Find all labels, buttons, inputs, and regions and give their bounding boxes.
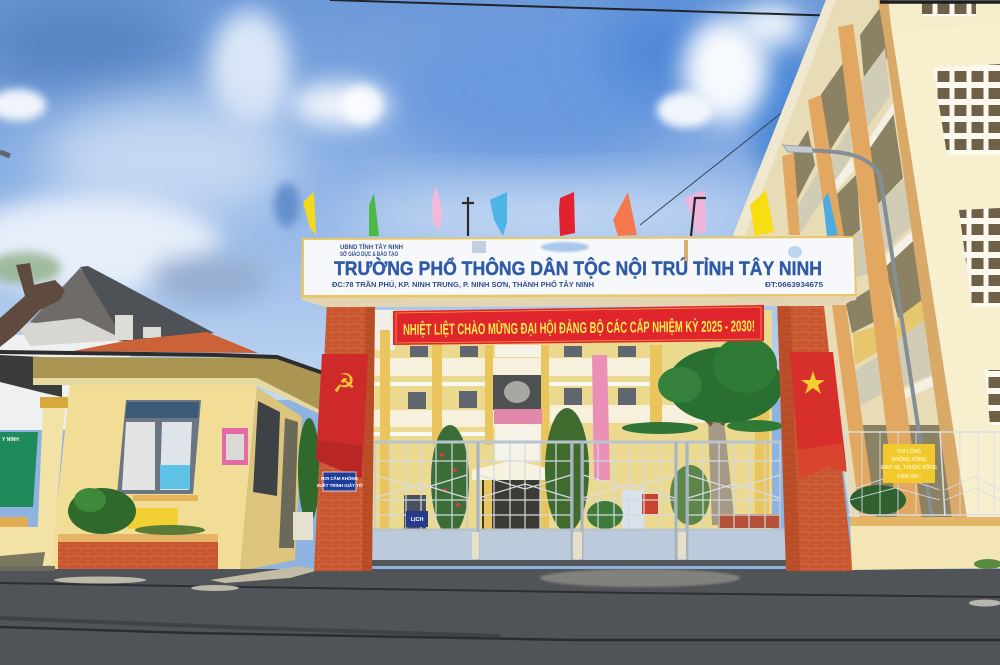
party flag (316, 354, 368, 478)
yellow box (128, 508, 178, 529)
tree at right of courtyard (622, 337, 783, 528)
low yellow wall (0, 527, 42, 556)
side door (279, 418, 298, 548)
right brick pillar (777, 297, 853, 571)
thick roof wire (880, 0, 1000, 4)
planter (58, 534, 218, 571)
pink poster (222, 428, 248, 465)
paint stains (541, 242, 589, 252)
orange corner strip (878, 0, 967, 518)
blue notice plate (316, 472, 363, 491)
photo panel (493, 345, 542, 462)
pink vertical banner (592, 355, 610, 480)
lamp post black (691, 198, 706, 236)
ministry heading (340, 244, 403, 258)
bush (68, 488, 205, 535)
yellow inner walls (853, 300, 927, 365)
flag orange (613, 192, 637, 236)
left background house (0, 266, 214, 430)
orange columns (782, 24, 922, 518)
school name: TRƯỜNG PHỔ THÔNG DÂN TỘC NỘI TRÚ TỈNH TÂY NINH (334, 258, 822, 280)
school sign blue behind gate: LỊCH (411, 517, 423, 523)
road (0, 566, 1000, 665)
ministry heading: SỞ GIÁO DỤC & ĐÀO TẠO (340, 251, 398, 258)
right fence and wall (843, 432, 1000, 570)
window sill (133, 495, 198, 501)
blue notice plate: NƠI CẤM KHÔNG (321, 476, 359, 481)
flag pink 1 (432, 186, 443, 232)
street lamp (0, 145, 932, 518)
red congress banner: NHIỆT LIỆT CHÀO MỪNG ĐẠI HỘI ĐẢNG BỘ CÁC CẤP NHIỆM KỲ 2025 - 2030! (403, 317, 755, 339)
blue notice plate: XUẤT TRÌNH GIẤY TỜ (316, 483, 363, 488)
yellow warning sign (881, 444, 937, 483)
school sign blue behind gate (406, 511, 428, 527)
yellow warning sign: ĐÀO XE, THUỐC XÔNG (881, 463, 937, 471)
top floor cream band (888, 0, 1000, 34)
flags row (303, 186, 838, 236)
grey balconies (797, 48, 933, 411)
soffit (33, 357, 323, 413)
flag yellow 1 (303, 192, 316, 235)
shrubs behind gate (431, 408, 623, 535)
flag cyan (490, 192, 507, 236)
tree stump left (0, 252, 65, 347)
cream end facade (892, 22, 1000, 518)
pole cross (462, 197, 474, 236)
side window (253, 401, 280, 496)
left brick pillar (314, 300, 375, 571)
yellow warning sign: CẢM ƠN ! (897, 473, 921, 480)
dark eave (0, 352, 323, 373)
national flag (790, 352, 847, 479)
dark ceilings (793, 5, 965, 518)
white balcony ledges (828, 103, 936, 400)
side wall (240, 387, 302, 571)
right school wing (733, 0, 1000, 518)
noticeboard window (117, 400, 201, 494)
red congress banner (393, 305, 764, 345)
entrance canopy (404, 460, 658, 530)
yellow columns (380, 330, 769, 530)
building windows (408, 346, 636, 409)
flag pink 2 (684, 190, 706, 236)
green notice board (0, 432, 38, 507)
yellow warning sign: KHÔNG XÔNG (892, 455, 926, 463)
gatehouse (0, 332, 323, 572)
address: ĐC:78 TRẦN PHÚ, KP. NINH TRUNG, P. NINH SƠN, THÀNH PHỐ TÂY NINH (332, 279, 594, 289)
phone: ĐT:0663934675 (765, 282, 823, 289)
dark lattice under left eave (0, 355, 62, 397)
flag yellow 2 (750, 190, 774, 236)
party flag: ☭ (332, 369, 356, 399)
gate sign board (301, 236, 857, 307)
flag red (559, 192, 575, 236)
ministry heading: UBND TỈNH TÂY NINH (340, 244, 403, 251)
sky with clouds (0, 0, 1000, 400)
tile roof (73, 332, 258, 353)
left column (36, 408, 65, 567)
lattice windows (922, 3, 1000, 425)
main gate (366, 442, 796, 566)
overhead power wires (330, 0, 1000, 225)
front wall (50, 383, 257, 571)
yellow warning sign: VUI LÒNG (897, 447, 921, 455)
flag green (369, 193, 379, 236)
soffit front rim (33, 378, 320, 414)
central school building (372, 310, 783, 535)
left entrance background (293, 418, 320, 540)
green notice board: Y NINH (2, 437, 19, 443)
flag cyan 2 (823, 192, 838, 236)
